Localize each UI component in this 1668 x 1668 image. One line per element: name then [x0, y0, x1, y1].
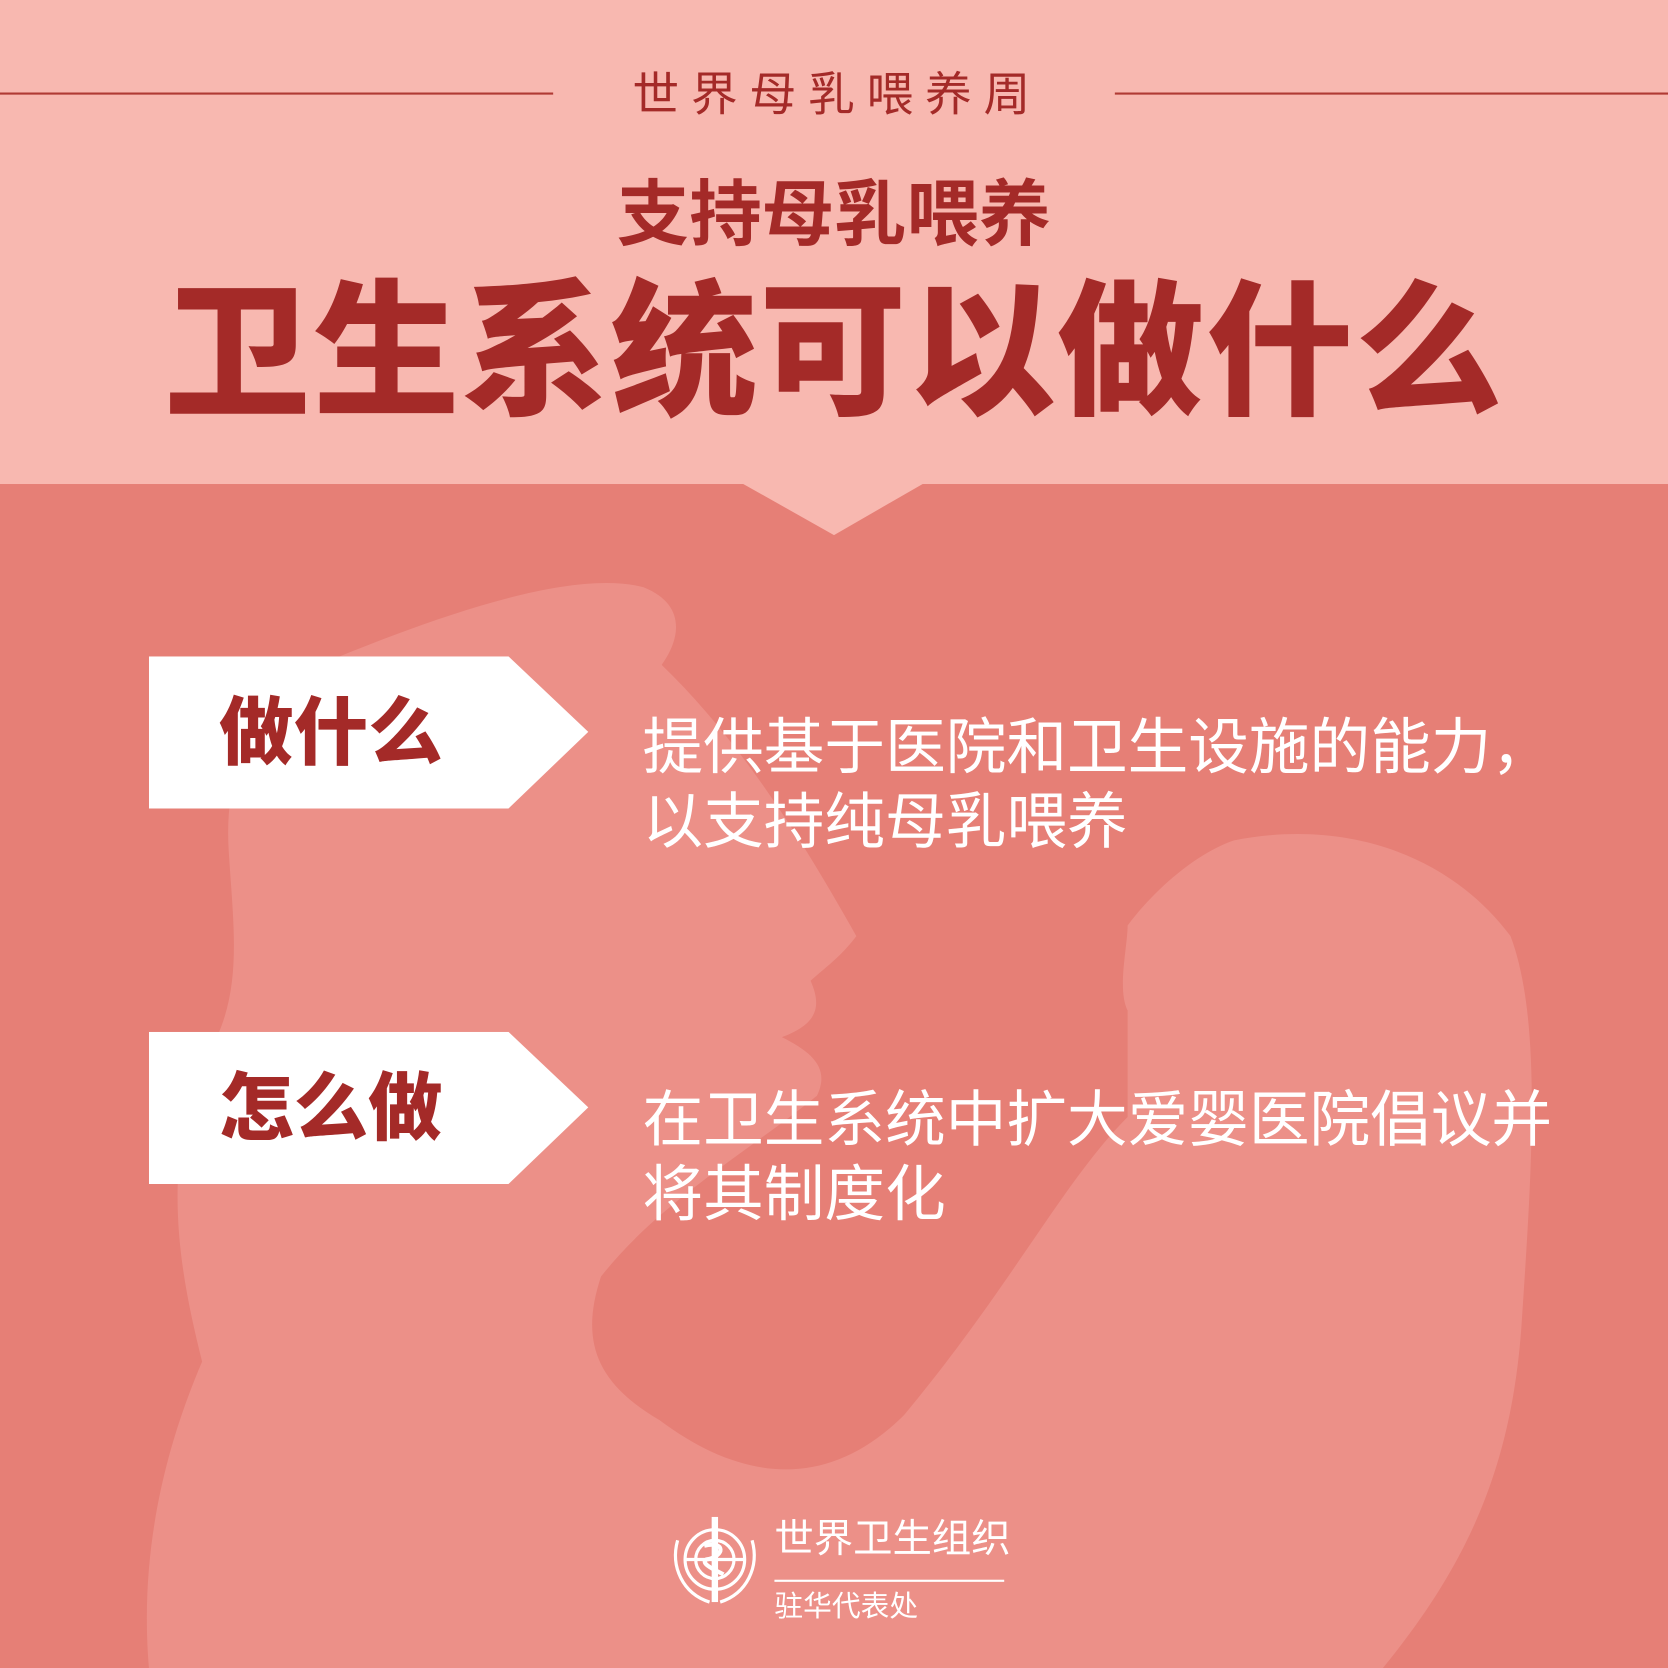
label text: 怎么做	[219, 1067, 443, 1150]
kicker: 世界母乳喂养周: 世界母乳喂养周	[632, 69, 1042, 121]
label box: 做什么	[149, 656, 588, 808]
text block: how	[643, 1086, 1552, 1229]
text block: how: 将其制度化	[643, 1161, 946, 1229]
logo: WHO	[674, 1516, 1011, 1622]
label text: 做什么	[219, 691, 443, 774]
text block: how: 在卫生系统中扩大爱婴医院倡议并	[643, 1086, 1552, 1154]
text block: what: 以支持纯母乳喂养	[643, 788, 1128, 856]
subtitle: 支持母乳喂养	[617, 174, 1051, 255]
office name: 驻华代表处	[774, 1590, 918, 1622]
text block: what: 提供基于医院和卫生设施的能力，	[643, 714, 1552, 782]
text block: what	[643, 714, 1552, 856]
org name: 世界卫生组织	[774, 1517, 1011, 1561]
icon: WHO emblem	[674, 1516, 756, 1604]
main title: 卫生系统可以做什么	[164, 271, 1504, 435]
label box: 怎么做	[149, 1032, 588, 1184]
